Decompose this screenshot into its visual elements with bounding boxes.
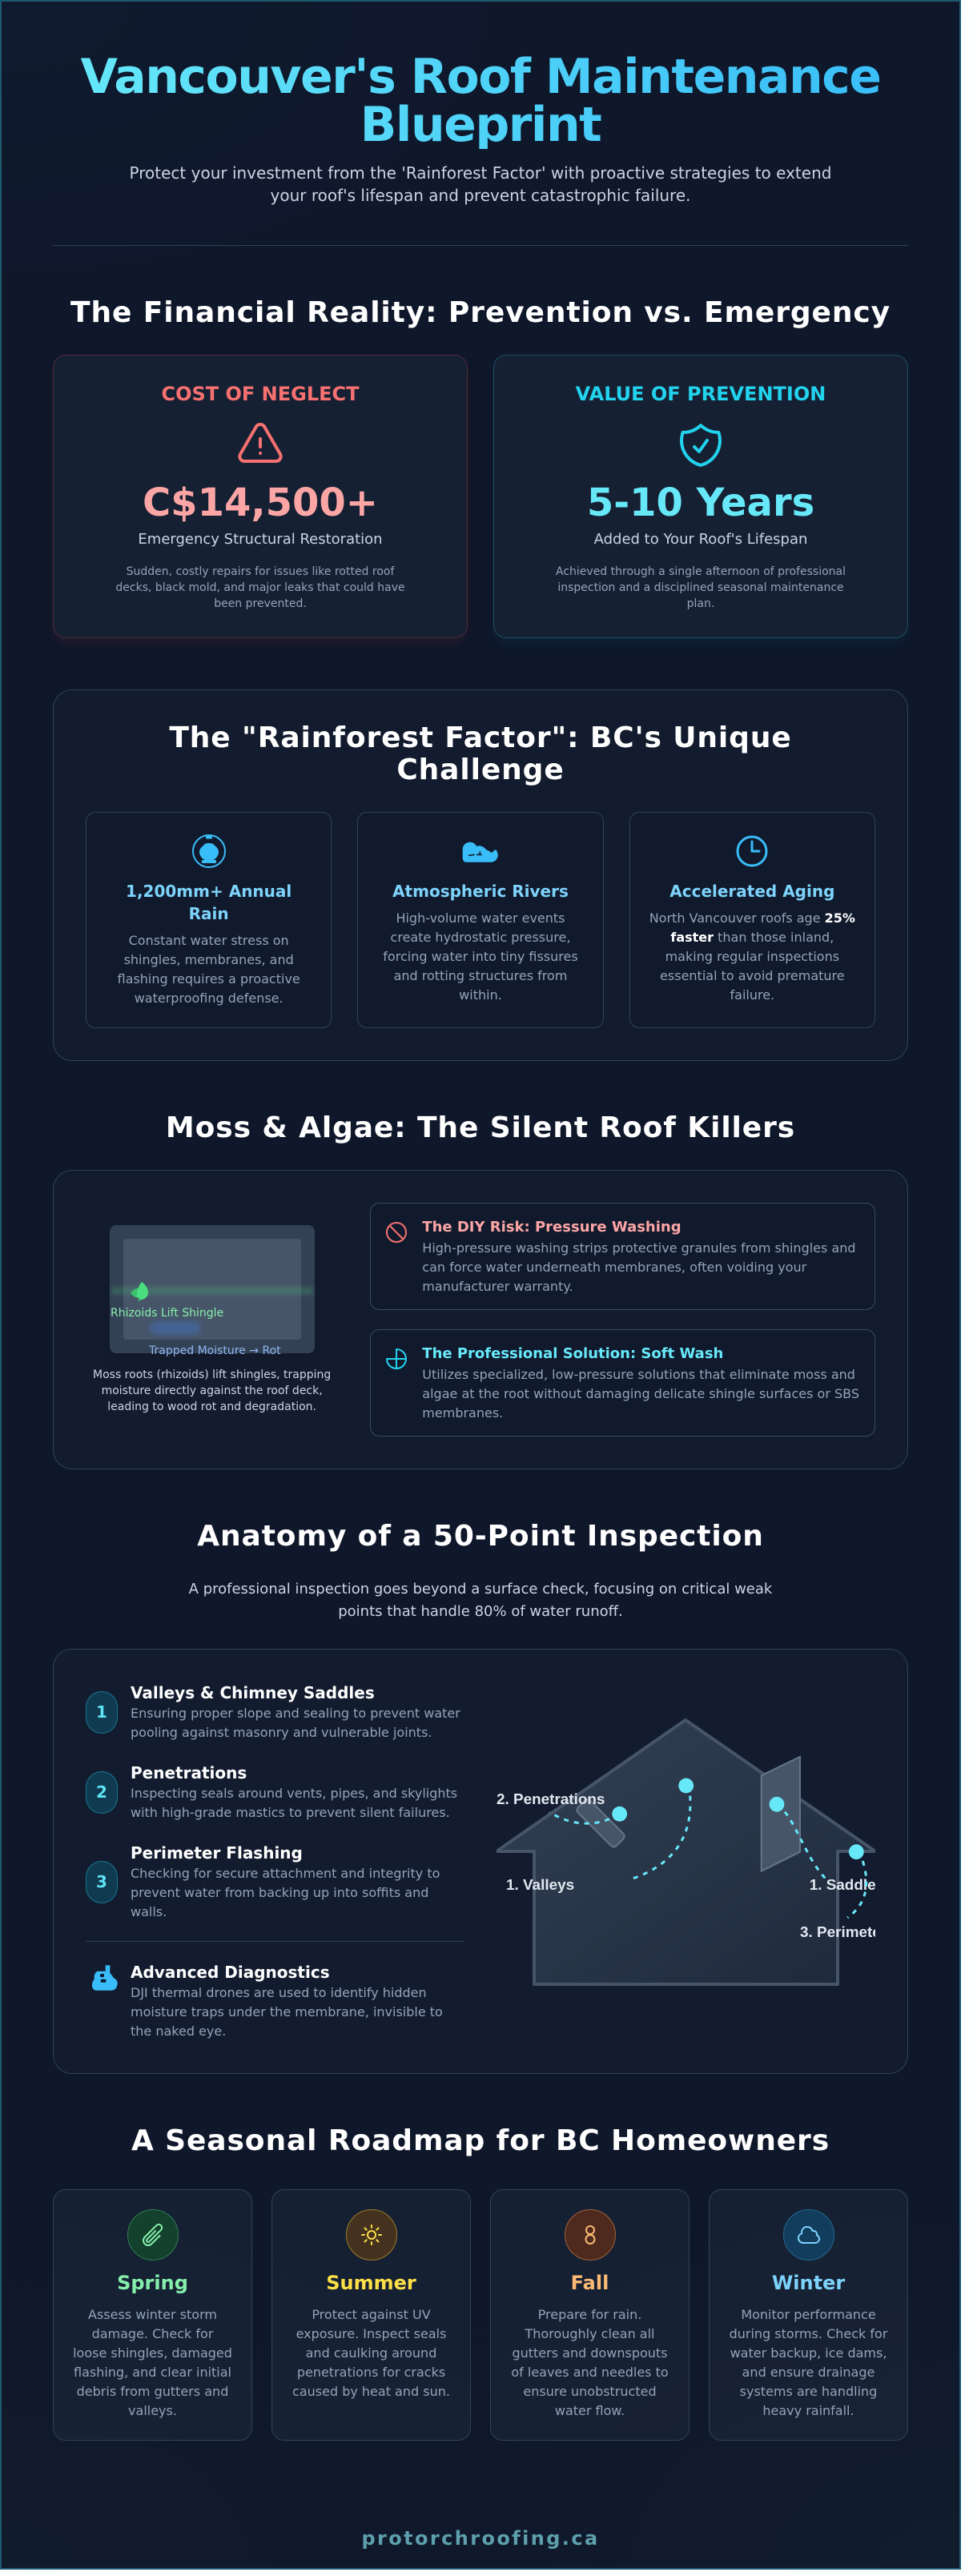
item 3: perimeter flashing xyxy=(86,1843,440,1919)
solution text: Utilizes specialized, low-pressure solutions that eliminate moss and algae at the root without damaging delicate shingle surfaces or SBS membranes. xyxy=(422,1367,859,1421)
badge 1 xyxy=(86,1691,118,1733)
icon: spring xyxy=(127,2209,178,2261)
card: summer xyxy=(271,2189,471,2441)
panel: value of prevention xyxy=(493,355,908,638)
card text: North Vancouver roofs age 25% faster than those inland, making regular inspections essential to avoid premature failure. xyxy=(649,910,855,1003)
header block xyxy=(53,53,908,246)
stat label: Emergency Structural Restoration xyxy=(138,531,383,548)
icon: moss leaf xyxy=(131,1282,148,1301)
heading: anatomy of inspection: Anatomy of a 50-Point Inspection xyxy=(197,1520,764,1553)
panel: rainforest factor xyxy=(53,689,908,1061)
badge 2 xyxy=(86,1771,118,1813)
text: professional solution xyxy=(422,1345,859,1421)
shingle surface xyxy=(123,1238,301,1339)
title xyxy=(53,53,908,149)
icon: cloud xyxy=(463,842,498,862)
card heading: value of prevention: VALUE OF PREVENTION xyxy=(576,383,826,405)
description: Sudden, costly repairs for issues like rotted roof decks, black mold, and major leaks that could have been prevented. xyxy=(115,565,405,610)
footer website: protorchroofing.ca xyxy=(361,2527,600,2550)
icon: shield check xyxy=(680,424,722,467)
item text: Checking for secure attachment and integrity to prevent water from backing up into soffits and walls. xyxy=(131,1866,440,1919)
card: fall xyxy=(490,2189,690,2441)
card: annual rain xyxy=(86,812,332,1028)
title: summer: Summer xyxy=(326,2272,416,2294)
risk cards column xyxy=(370,1203,875,1437)
icon: summer xyxy=(346,2209,397,2261)
panel: inspection xyxy=(53,1649,908,2074)
item 2: penetrations xyxy=(86,1763,457,1820)
financial comparison cards xyxy=(53,355,908,645)
card: professional solution xyxy=(370,1329,875,1437)
roof vent xyxy=(575,1798,626,1848)
callouts: dashed lines xyxy=(549,1796,866,1918)
card: winter xyxy=(709,2189,908,2441)
diagram caption: Moss roots (rhizoids) lift shingles, trapping moisture directly against the roof deck, leading to wood rot and degradation. xyxy=(93,1368,331,1413)
house outline xyxy=(497,1720,875,1984)
card: diy risk xyxy=(370,1203,875,1310)
label: trapped moisture: Trapped Moisture → Rot xyxy=(149,1344,281,1356)
stat: added lifespan: 5-10 Years xyxy=(587,480,814,525)
icon: winter xyxy=(783,2209,834,2261)
item text xyxy=(131,1683,460,1740)
card: accelerated aging xyxy=(629,812,875,1028)
trapped moisture blob xyxy=(150,1321,200,1334)
panel: moss and algae xyxy=(53,1170,908,1469)
title: spring: Spring xyxy=(117,2272,188,2294)
section: financial reality xyxy=(53,296,908,645)
heading: seasonal roadmap: A Seasonal Roadmap for BC Homeowners xyxy=(131,2124,830,2157)
heading: rainforest factor: The "Rainforest Factor": BC's Unique Challenge xyxy=(169,721,792,786)
solution title: The Professional Solution: Soft Wash xyxy=(422,1345,723,1362)
label: valleys: 1. Valleys xyxy=(506,1877,574,1894)
risk text: High-pressure washing strips protective granules from shingles and can force water underneath membranes, often voiding your manufacturer warranty. xyxy=(422,1240,856,1294)
inspection checklist xyxy=(86,1683,464,2039)
icon: soft wash xyxy=(386,1348,407,1369)
item text: Valleys & Chimney Saddles xyxy=(131,1683,375,1702)
inspection intro text: A professional inspection goes beyond a surface check, focusing on critical weak points that handle 80% of water runoff. xyxy=(189,1581,772,1620)
risk title: The DIY Risk: Pressure Washing xyxy=(422,1219,681,1236)
heading: moss and algae: Moss & Algae: The Silent Roof Killers xyxy=(166,1111,795,1144)
moss band xyxy=(111,1286,313,1294)
seasonal cards xyxy=(53,2189,908,2441)
title: fall: Fall xyxy=(571,2272,609,2294)
item text: Penetrations xyxy=(131,1763,247,1782)
house inspection diagram xyxy=(497,1718,875,1986)
text: diy risk xyxy=(422,1219,856,1294)
stat: restoration cost: C$14,500+ xyxy=(143,480,378,525)
card text: High-volume water events create hydrostatic pressure, forcing water into tiny fissures and rotting structures from within. xyxy=(383,910,578,1003)
item text xyxy=(131,1763,457,1820)
card heading: cost of neglect: COST OF NEGLECT xyxy=(161,383,360,405)
card title: Atmospheric Rivers xyxy=(392,882,569,901)
item text: Ensuring proper slope and sealing to prevent water pooling against masonry and vulnerable joints. xyxy=(131,1706,460,1740)
icon: drone xyxy=(91,1965,118,1991)
badge 1: 1 xyxy=(96,1702,107,1722)
card: atmospheric rivers xyxy=(357,812,604,1028)
text: winter: Monitor performance during storms. Check for water backup, ice dams, and ensure drainage systems are handling heavy rainfall. xyxy=(730,2307,887,2418)
label: penetrations: 2. Penetrations xyxy=(497,1791,605,1808)
item text: Perimeter Flashing xyxy=(131,1843,303,1863)
label: rhizoids: Rhizoids Lift Shingle xyxy=(111,1307,223,1320)
moss diagram column xyxy=(93,1225,331,1413)
title: Vancouver's Roof Maintenance xyxy=(81,49,880,105)
diagram: lifted shingle xyxy=(110,1225,315,1353)
three factor cards xyxy=(86,812,875,1028)
card text: Constant water stress on shingles, membranes, and flashing requires a proactive waterproofing defense. xyxy=(118,933,300,1006)
card: spring xyxy=(53,2189,252,2441)
badge 3: 3 xyxy=(96,1872,107,1891)
title: Blueprint xyxy=(360,97,601,153)
icon: no symbol xyxy=(386,1222,407,1243)
item text: Inspecting seals around vents, pipes, and skylights with high-grade mastics to prevent silent failures. xyxy=(131,1786,457,1820)
icon: fall xyxy=(564,2209,615,2261)
card title: 1,200mm+ Annual Rain xyxy=(126,882,291,923)
text: fall: Prepare for rain. Thoroughly clean all gutters and downspouts of leaves and needles to ensure unobstructed water flow. xyxy=(511,2307,669,2418)
stat label: Added to Your Roof's Lifespan xyxy=(594,531,807,548)
item 1: valleys xyxy=(86,1683,460,1740)
text: spring: Assess winter storm damage. Check for loose shingles, damaged flashing, and clear initial debris from gutters and valleys. xyxy=(73,2307,232,2418)
item text: DJI thermal drones are used to identify hidden moisture traps under the membrane, invisible to the naked eye. xyxy=(131,1985,443,2039)
callouts: dots xyxy=(612,1778,864,1859)
item 4: advanced diagnostics xyxy=(86,1941,464,2041)
chimney xyxy=(762,1757,800,1871)
heading: financial reality: The Financial Reality: Prevention vs. Emergency xyxy=(70,296,891,329)
icon: clock xyxy=(737,836,767,866)
panel: cost of neglect xyxy=(53,355,468,638)
badge 3 xyxy=(86,1861,118,1903)
item text: Advanced Diagnostics xyxy=(131,1963,330,1982)
text: summer: Protect against UV exposure. Inspect seals and caulking around penetrations for cracks caused by heat and sun. xyxy=(292,2307,450,2399)
badge 2: 2 xyxy=(96,1782,107,1802)
subtitle: Protect your investment from the 'Rainforest Factor' with proactive strategies to extend your roof's lifespan and prevent catastrophic failure. xyxy=(130,163,831,205)
card title: Accelerated Aging xyxy=(669,882,834,901)
icon: rain gauge xyxy=(192,834,226,868)
description: Achieved through a single afternoon of professional inspection and a disciplined seasonal maintenance plan. xyxy=(556,565,846,610)
icon: warning triangle xyxy=(238,423,283,463)
title: winter: Winter xyxy=(772,2272,845,2294)
